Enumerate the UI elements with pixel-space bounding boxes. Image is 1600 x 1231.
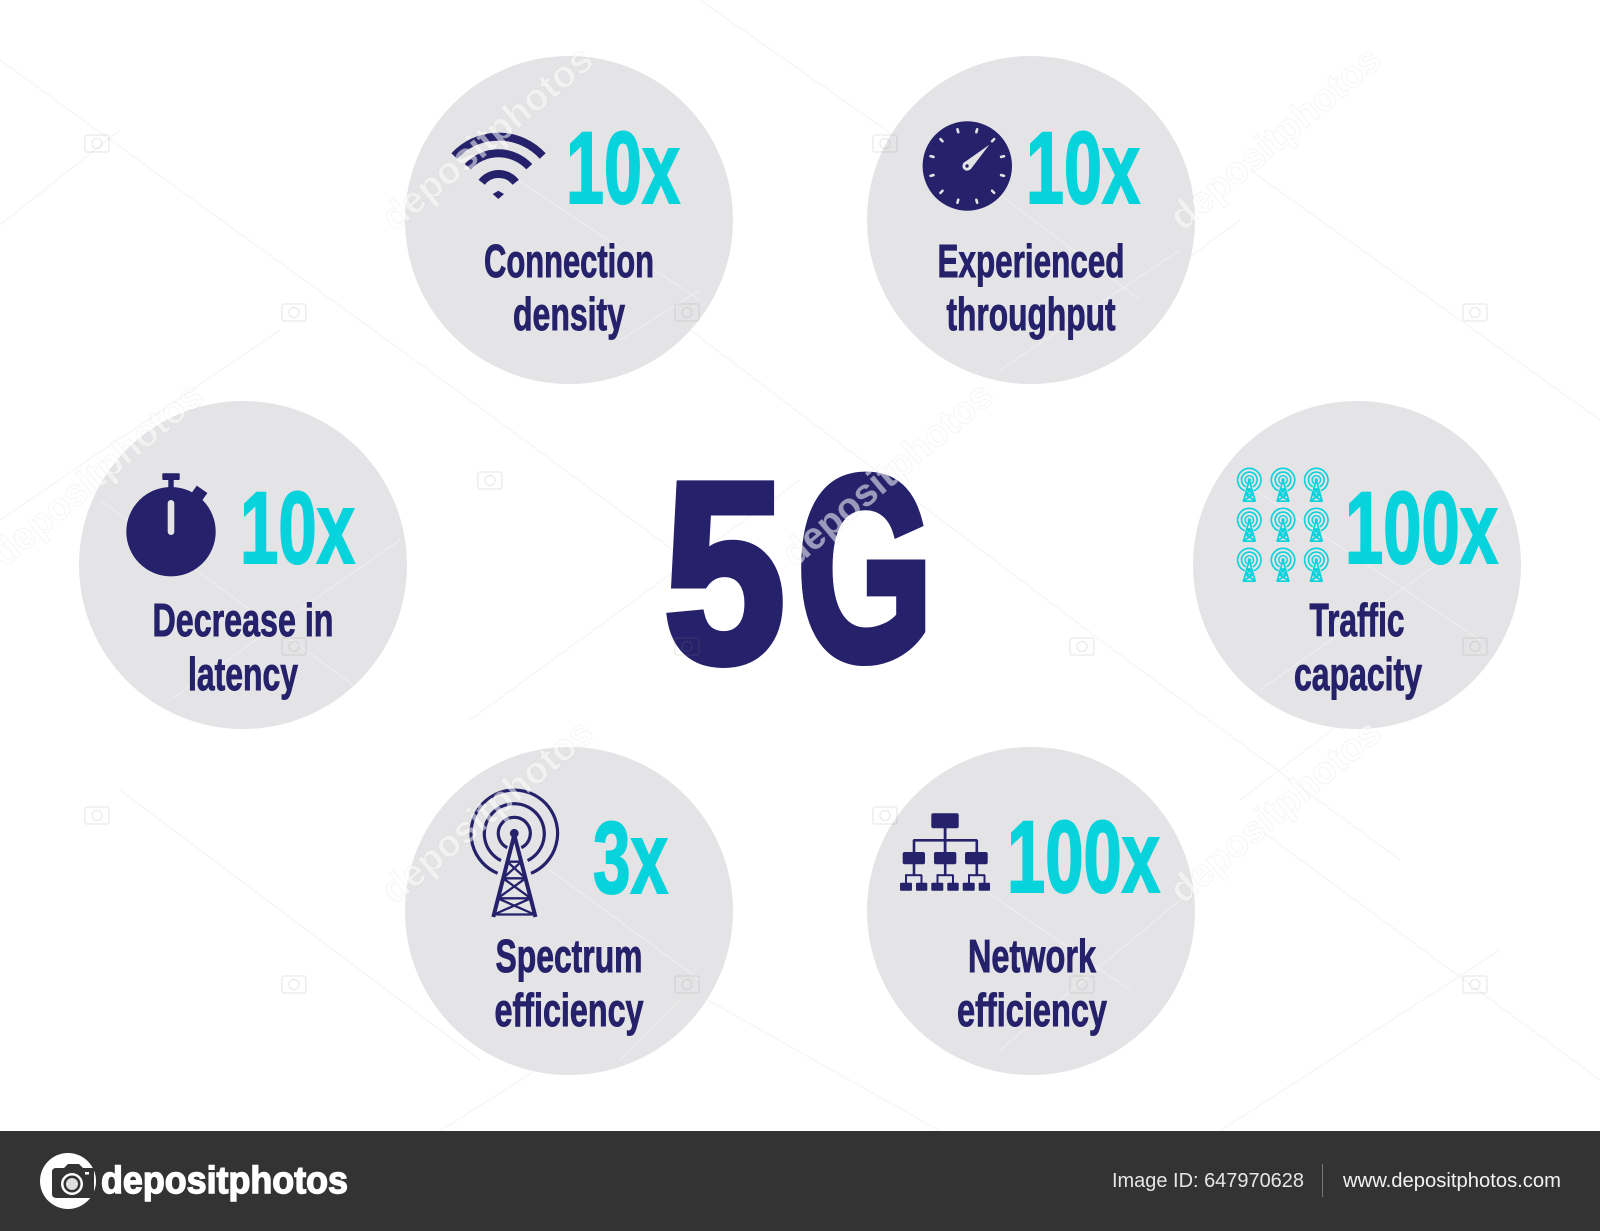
title: 5G: 5 <box>664 430 785 716</box>
label: latency <box>188 648 298 700</box>
label: capacity <box>1294 648 1422 700</box>
panel: decrease in latency <box>126 471 355 700</box>
label: density <box>513 288 625 340</box>
icon: radio tower <box>471 790 558 917</box>
label: efficiency <box>494 984 644 1036</box>
multiplier: 10x <box>1026 111 1140 225</box>
multiplier: 3x <box>593 801 668 915</box>
text: depositphotos <box>1162 38 1389 239</box>
label: Decrease in <box>152 594 334 646</box>
title: 5G <box>664 423 933 716</box>
label: Traffic <box>1310 594 1404 646</box>
panel: traffic capacity <box>1238 468 1498 700</box>
label: Experienced <box>938 235 1124 287</box>
multiplier: 100x <box>1345 471 1498 585</box>
label <box>957 930 1107 1036</box>
circle: spectrum efficiency <box>405 747 733 1075</box>
label <box>494 930 644 1036</box>
circle: decrease in latency <box>79 401 407 729</box>
logo wordmark: depositphotos <box>101 1160 348 1202</box>
label <box>938 235 1124 340</box>
circle: network efficiency <box>867 747 1195 1075</box>
multiplier: 10x <box>240 471 355 585</box>
label <box>1294 594 1422 700</box>
text: depositphotos <box>374 38 601 239</box>
image id: Image ID: 647970628 <box>1112 1170 1304 1192</box>
label: Spectrum <box>496 930 642 982</box>
label <box>484 235 654 340</box>
icon: network hierarchy <box>900 813 990 891</box>
circle: experienced throughput <box>867 56 1195 384</box>
panel: experienced throughput <box>923 111 1140 340</box>
text: depositphotos <box>374 711 601 912</box>
icon: speedometer <box>923 121 1012 211</box>
icon: stopwatch <box>126 473 216 576</box>
label: throughput <box>946 288 1116 340</box>
website url: www.depositphotos.com <box>1342 1170 1561 1192</box>
icon: depositphotos logo mark <box>40 1153 96 1209</box>
label: efficiency <box>957 984 1107 1036</box>
label: Network <box>968 930 1096 982</box>
title: 5G: G <box>797 423 933 715</box>
multiplier: 100x <box>1007 800 1160 914</box>
circle: traffic capacity <box>1193 401 1521 729</box>
circle: connection density <box>405 56 733 384</box>
panel: connection density <box>454 111 680 340</box>
label: Connection <box>484 235 654 287</box>
icon: wifi <box>454 137 543 199</box>
label <box>152 594 334 700</box>
multiplier: 10x <box>566 111 680 225</box>
text: depositphotos <box>1162 711 1389 912</box>
text: depositphotos <box>774 374 1001 575</box>
icon: tower grid <box>1238 468 1328 582</box>
panel: spectrum efficiency <box>471 790 668 1036</box>
panel: network efficiency <box>900 800 1160 1036</box>
footer bar <box>0 1131 1600 1231</box>
